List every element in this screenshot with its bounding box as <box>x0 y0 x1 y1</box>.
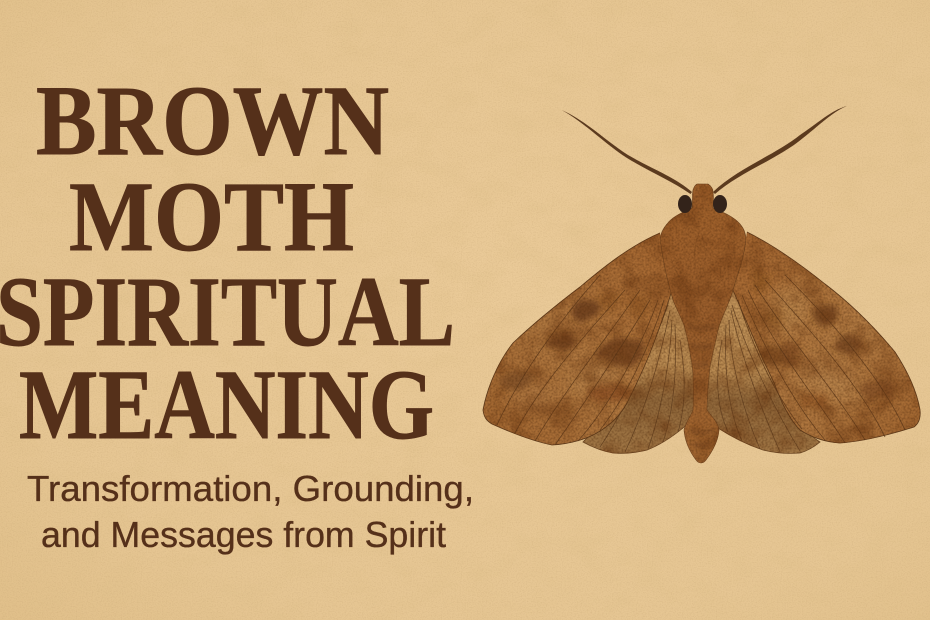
left antenna <box>562 110 692 194</box>
right forewing veins <box>738 275 905 443</box>
right forewing markings <box>752 272 897 410</box>
title line: MOTH: MOTH <box>69 161 354 272</box>
subtitle <box>27 468 474 555</box>
subtitle line 1: Transformation, Grounding, <box>27 468 474 509</box>
right hindwing <box>702 287 820 453</box>
subtitle line 2: and Messages from Spirit <box>41 514 446 555</box>
moth body <box>660 184 746 463</box>
left forewing veins <box>497 275 664 445</box>
right antenna <box>713 106 847 194</box>
title line: SPIRITUAL: SPIRITUAL <box>0 256 455 367</box>
right eye <box>713 195 727 213</box>
left hindwing veins <box>600 305 684 452</box>
left hindwing <box>583 285 698 453</box>
title line: BROWN: BROWN <box>36 65 389 176</box>
left forewing markings <box>501 291 648 407</box>
right forewing <box>733 232 920 443</box>
title <box>0 65 455 460</box>
left forewing <box>483 233 672 445</box>
title line: MEANING: MEANING <box>19 349 434 460</box>
thorax shading and segments <box>669 230 734 296</box>
right hindwing veins <box>718 305 800 452</box>
moth illustration <box>483 106 920 463</box>
left eye <box>678 195 692 213</box>
